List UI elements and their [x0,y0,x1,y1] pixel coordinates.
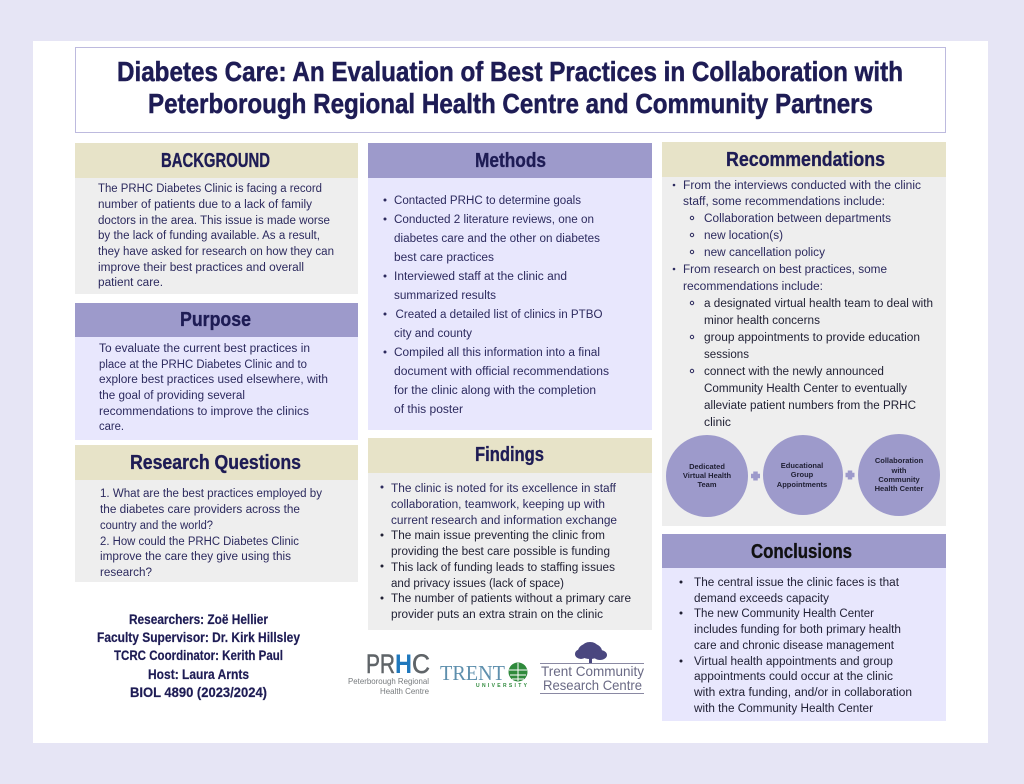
text: background: The PRHC Diabetes Clinic is facing a record [98,183,322,195]
heading: background: BACKGROUND [161,150,270,172]
list: best practice recommendations: clinic [704,417,731,429]
logo: Trent University: TRENT [440,661,505,685]
list: findings [380,483,631,621]
heading: purpose: Purpose [180,309,251,331]
diagram: recommendation circles [666,434,940,517]
logo: Trent Community Research Centre: Trent Community [541,663,644,679]
findings: staff collaboration: current research and information exchange [391,515,617,527]
credits [97,612,300,700]
heading: conclusions: Conclusions [751,541,852,563]
list: conclusions: appointments could occur at the clinic [694,671,893,683]
list: conclusions: includes funding for both primary health [694,624,901,636]
logo: PRHC: Peterborough Regional [348,676,429,686]
logo: PRHC: Health Centre [380,686,429,696]
list: conclusions: The new Community Health Center [694,608,874,620]
credits: Researchers: Zoë Hellier [129,612,269,627]
findings: funding and strain: The number of patients without a primary care [391,593,631,605]
logo: Trent Community Research Centre: Research Centre [543,677,642,693]
list: recommendations: From the interviews conducted with the clinic [683,180,921,192]
text: research questions [100,488,322,579]
list: methods [384,195,609,416]
list: conclusions: Virtual health appointments and group [694,656,893,668]
diagram: recommendation circles: with [890,466,907,475]
panel: methods [368,143,652,430]
logo: Trent University: UNIVERSITY [476,683,528,689]
logo: PRHC: PR [366,649,395,679]
list: methods: Compiled all this information into a final [394,347,600,359]
list: methods: Created a detailed list of clinics in PTBO [396,309,603,321]
panel: purpose [75,303,358,440]
text: purpose: explore best practices used elsewhere, with [99,374,328,386]
list: recommendations [673,180,921,373]
list: recommendations: recommendations include: [683,281,823,293]
findings: funding and strain: This lack of funding leads to staffing issues [391,562,615,574]
list: methods: city and county [394,328,472,340]
text: background [98,183,334,289]
text: background: by the lack of funding available. As a result, [98,230,320,242]
diagram: recommendation circles: Team [697,480,717,489]
diagram: recommendation circles: Educational [781,461,823,470]
credits: Faculty Supervisor: Dr. Kirk Hillsley [97,630,300,645]
list: best practice recommendations: connect with the newly announced [704,366,884,378]
panel: research questions [75,445,358,582]
title [76,48,946,132]
text: research questions: 2. How could the PRHC Diabetes Clinic [100,536,299,548]
list: best practice recommendations: group appointments to provide education [704,332,920,344]
list: conclusions: The central issue the clinic faces is that [694,577,900,589]
list: methods: for the clinic along with the completion [394,385,596,397]
list: conclusions: with extra funding, and/or in collaboration [693,687,912,699]
text: purpose: the goal of providing several [99,390,245,402]
list: recommendations: new location(s) [704,230,783,242]
text: purpose: recommendations to improve the clinics [99,406,309,418]
diagram: recommendation circles: Collaboration [875,456,924,465]
list: best practice recommendations: minor health concerns [704,315,820,327]
credits: TCRC Coordinator: Kerith Paul [114,648,283,663]
list: best practice recommendations [704,298,933,429]
list: methods: of this poster [394,404,463,416]
logos [348,642,644,696]
panel: findings [368,438,652,630]
list: methods: Interviewed staff at the clinic and [394,271,567,283]
findings: funding and strain: The main issue preventing the clinic from [391,530,605,542]
text: research questions: research? [100,567,152,579]
panel: recommendations [662,142,946,526]
logo: PRHC: C [412,649,430,679]
findings: staff collaboration: The clinic is noted for its excellence in staff [391,483,617,495]
text: purpose: place at the PRHC Diabetes Clinic and to [99,359,307,371]
list: methods: Contacted PRHC to determine goals [394,195,581,207]
text: purpose [99,343,328,433]
credits: BIOL 4890 (2023/2024) [130,685,267,700]
text: background: number of patients due to a lack of family [98,199,312,211]
list: best practice recommendations: alleviate patient numbers from the PRHC [704,400,916,412]
text: purpose: care. [99,421,124,433]
findings: staff collaboration [380,483,617,527]
list: recommendations: Collaboration between departments [704,213,891,225]
text: research questions: the diabetes care providers across the [100,504,300,516]
list: conclusions [680,577,912,715]
title: Diabetes Care: An Evaluation of Best Practices in Collaboration with [117,56,903,87]
heading: research questions: Research Questions [130,452,301,474]
credits: Host: Laura Arnts [148,667,249,682]
heading: methods: Methods [475,150,546,172]
heading: recommendations: Recommendations [726,149,885,171]
text: research questions: improve the care they give using this [100,551,291,563]
findings: funding and strain [380,530,631,621]
heading: findings: Findings [475,444,544,466]
title: Peterborough Regional Health Centre and Community Partners [148,88,873,119]
findings: funding and strain: providing the best care possible is funding [391,546,610,558]
list: best practice recommendations: Community Health Center to eventually [704,383,907,395]
list: recommendations: From research on best practices, some [683,264,887,276]
diagram: recommendation circles: Appointments [777,480,827,489]
panel: background [75,143,358,294]
list: methods: best care practices [394,252,494,264]
diagram: recommendation circles: Health Center [875,484,923,493]
list: methods: diabetes care and the other on diabetes [394,233,600,245]
list: conclusions: demand exceeds capacity [694,593,829,605]
logo: Trent Community Research Centre [540,642,644,694]
list: best practice recommendations: a designated virtual health team to deal with [704,298,933,310]
findings: funding and strain: provider puts an extra strain on the clinic [391,609,603,621]
list: conclusions: care and chronic disease management [694,640,895,652]
panel: conclusions [662,534,946,721]
logo: Trent University [440,661,528,689]
text: purpose: To evaluate the current best practices in [99,343,310,355]
list: recommendations: new cancellation policy [704,247,825,259]
list: recommendations: staff, some recommendations include: [683,196,885,208]
diagram: recommendation circles: Virtual Health [683,471,732,480]
text: research questions: country and the world? [100,520,213,532]
text: background: improve their best practices and overall [98,262,304,274]
list: best practice recommendations: sessions [704,349,749,361]
list: methods: summarized results [394,290,496,302]
list: conclusions: with the Community Health Center [693,703,873,715]
list: methods: Conducted 2 literature reviews, one on [394,214,594,226]
diagram: recommendation circles: Community [878,475,920,484]
findings: funding and strain: and privacy issues (lack of space) [391,578,564,590]
text: background: they have asked for research on how they can [98,246,334,258]
text: background: patient care. [98,277,163,289]
text: background: doctors in the area. This issue is made worse [98,215,330,227]
diagram: recommendation circles: Group [791,470,814,479]
findings: staff collaboration: collaboration, teamwork, keeping up with [391,499,605,511]
text: research questions: 1. What are the best practices employed by [100,488,322,500]
logo: PRHC: H [395,649,412,679]
diagram: recommendation circles: Dedicated [689,462,725,471]
list: methods: document with official recommendations [394,366,609,378]
logo: PRHC [348,649,430,696]
